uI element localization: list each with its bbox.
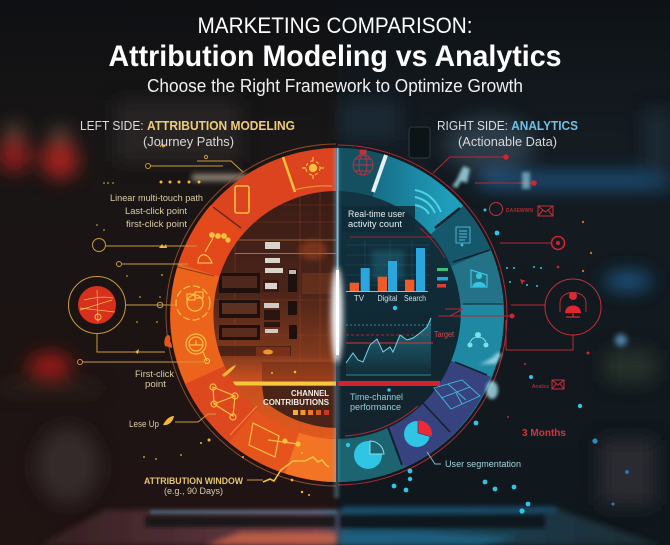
icon: pie teal [354,441,384,469]
warm light streak [192,174,247,181]
icon: profile card [471,270,487,287]
user segmentation label: User segmentation [445,459,521,469]
icon: gear book [176,286,210,320]
channel contributions label: CHANNEL [291,389,329,398]
right ring icons [353,150,488,409]
left path labels: Linear multi-touch path [110,193,203,203]
time-channel label: Time-channel [350,392,403,402]
ring segment: pie [337,448,396,460]
lese up label: Lese Up [129,419,159,429]
left journey circle [68,276,126,334]
left heading: LEFT SIDE: ATTRIBUTION MODELING [80,119,295,133]
icon: headset [468,332,488,347]
icon: globe [353,150,373,175]
label box [342,206,415,232]
right inner panel [338,191,461,439]
bar chart [342,206,448,303]
channel bar [233,382,337,386]
left ring [166,144,336,486]
right connector lines [427,157,573,464]
ring segment: indigo [396,369,471,448]
dark zone under the bar [262,386,337,428]
first-click label [135,369,175,389]
real-time label [348,209,405,229]
icon: triangle network [210,384,238,420]
red channel bar [338,381,440,386]
first-click label: point [145,379,167,389]
channel contributions label: CONTRIBUTIONS [263,398,330,407]
time-channel label: performance [350,402,401,412]
icon: wifi waves [415,190,441,214]
right heading: RIGHT SIDE: ANALYTICS [437,119,578,133]
attribution window label [144,476,243,496]
title line 1: MARKETING COMPARISON: [198,13,472,38]
ring segment: top glowing [337,170,379,176]
ring segment: bottom glow [292,453,337,460]
first-click label: First-click [135,369,175,379]
real-time label: activity count [348,219,403,229]
dark phone [409,127,430,158]
bar chart: TV [354,294,365,303]
title [108,13,562,96]
line chart: Target [434,330,455,339]
icon: gauge [186,334,210,364]
left path labels: first-click point [126,219,188,229]
ring segment: notes [447,220,471,258]
ring segment: square [243,426,292,453]
center glow divider [331,148,343,498]
attribution window label: (e.g., 90 Days) [164,486,223,496]
ring segment: tree [199,219,227,270]
icon: pie with red slice [404,420,432,447]
right subheading: (Actionable Data) [458,135,557,149]
ring segment: bright orange [192,270,205,375]
icon: phone [235,186,249,213]
ring segment: profile [471,258,482,304]
ring segment: wifi [379,176,447,220]
icon: document [456,227,470,243]
envelope analytics [552,380,564,389]
analytics tag: Analics [532,384,549,390]
laptop [40,507,660,545]
subtitle: Choose the Right Framework to Optimize Growth [147,75,523,96]
icon: square chart [249,423,300,457]
pie icons [354,420,432,469]
left dots [96,144,310,496]
line chart [346,318,455,375]
right ring [338,144,508,486]
three months label: 3 Months [522,427,566,439]
right dots [346,221,629,514]
bar chart: Search [404,294,426,303]
bar chart: Digital [378,294,398,303]
icon: network target [302,157,324,179]
icon: tree [198,233,230,263]
real-time label: Real-time user [348,209,405,219]
left inner panel [213,191,336,439]
right nodes [484,154,564,318]
left subheading: (Journey Paths) [143,135,234,149]
title line 2: Attribution Modeling vs Analytics [108,40,562,73]
left path labels: Last-click point [125,206,188,216]
channel contributions label [263,389,330,415]
dark equipment panels [218,242,337,382]
daxewwn tag: DAXEWWN [506,208,533,214]
attribution window label: ATTRIBUTION WINDOW [144,476,243,487]
blurred runner figures [452,166,530,399]
left path labels [110,193,203,229]
icon: floor plan [434,380,480,409]
ring segment: triangle [205,375,243,426]
left connector lines [78,155,263,480]
envelope top [538,206,553,216]
left ring icons [176,157,329,482]
right user circle [545,279,601,335]
time-channel label [350,392,403,412]
icon: window line [263,457,329,482]
ring segment: headset [471,304,482,369]
